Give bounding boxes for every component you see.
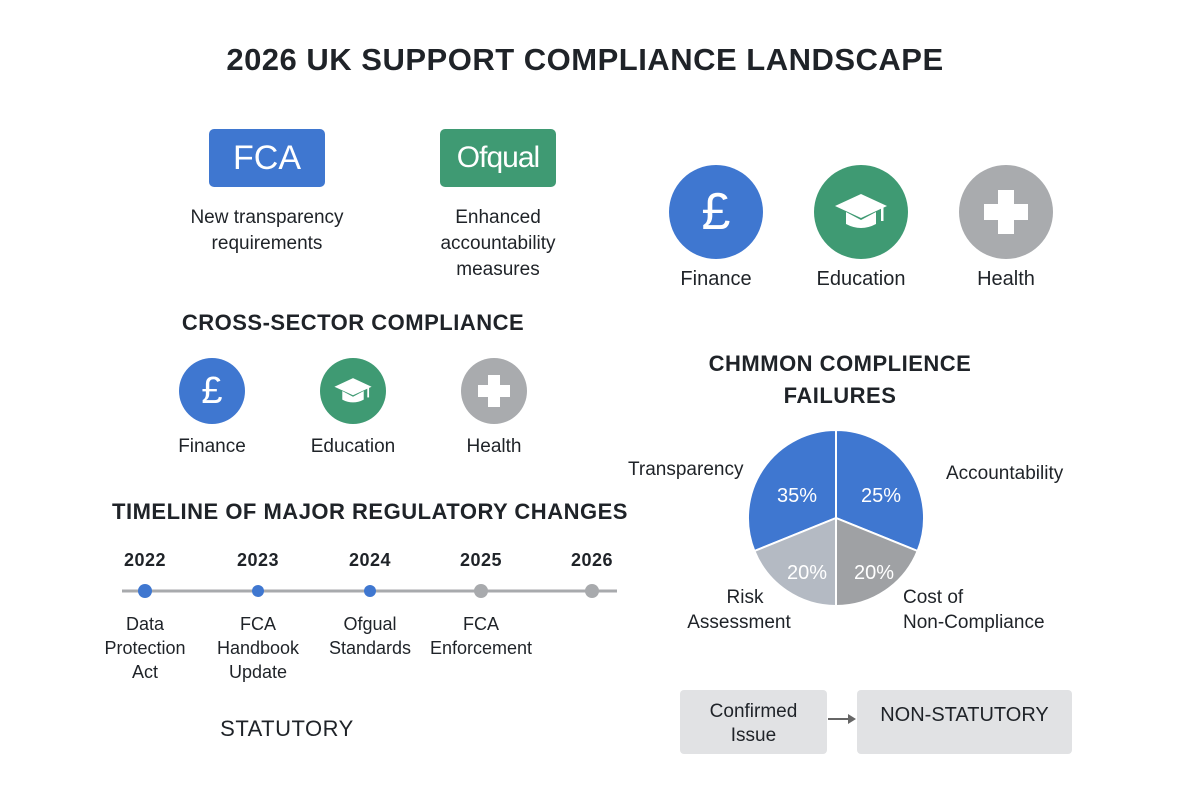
pie chart: 20% [854, 562, 894, 584]
icons: large sectors [669, 165, 1053, 290]
timeline: 2022 [124, 550, 166, 570]
timeline: Update [229, 662, 287, 682]
heading: failures: CHMMON COMPLIENCE [709, 351, 971, 376]
heading: cross-sector: CROSS-SECTOR COMPLIANCE [182, 310, 524, 335]
pie chart: 35% [777, 485, 817, 507]
timeline: Standards [329, 638, 411, 658]
text: Ofqual: Enhanced accountability measures [440, 207, 556, 280]
timeline [104, 550, 617, 682]
icon: education [814, 165, 908, 259]
icons: small sectors: Education [311, 436, 395, 457]
icons: small sectors [178, 358, 527, 457]
icon: health [959, 165, 1053, 259]
box: confirmed issue [680, 690, 827, 754]
arrow [828, 714, 856, 724]
box: non-statutory [857, 690, 1072, 754]
timeline: Handbook [217, 638, 299, 658]
pie chart [628, 431, 1064, 633]
badge: FCA [209, 129, 325, 187]
timeline: FCA [240, 614, 276, 634]
pie chart: Transparency [628, 459, 744, 480]
timeline: 2026 [571, 550, 613, 570]
box: non-statutory: NON-STATUTORY [880, 704, 1049, 726]
pie chart: Cost of [903, 587, 964, 608]
badge: FCA: FCA [233, 139, 301, 177]
title: 2026 UK SUPPORT COMPLIANCE LANDSCAPE [226, 42, 944, 77]
text: FCA: New transparency requirements [190, 207, 344, 254]
pie chart: Non-Compliance [903, 612, 1045, 633]
timeline: Ofgual [343, 614, 397, 634]
icon: finance [669, 165, 763, 259]
heading: timeline: TIMELINE OF MAJOR REGULATORY CHANGES [112, 499, 628, 524]
icons: small sectors: £ [201, 370, 223, 412]
pie chart: Risk [727, 587, 764, 608]
pie chart: 20% [787, 562, 827, 584]
timeline: 2024 [349, 550, 391, 570]
icons: large sectors: Health [977, 268, 1035, 290]
timeline: Act [132, 662, 158, 682]
timeline: Data [126, 614, 164, 634]
timeline: Protection [104, 638, 186, 658]
badge: Ofqual [440, 129, 556, 187]
pie chart: Assessment [687, 612, 791, 633]
box: confirmed issue: Confirmed Issue [710, 701, 797, 746]
labels: Finance [680, 268, 752, 290]
heading: failures [709, 351, 971, 408]
timeline: FCA [463, 614, 499, 634]
heading: failures: FAILURES [784, 383, 896, 408]
pie chart: 25% [861, 485, 901, 507]
pie chart: Accountability [946, 463, 1064, 484]
timeline: 2023 [237, 550, 279, 570]
icons: small sectors: Health [467, 436, 521, 457]
timeline: Enforcement [430, 638, 532, 658]
icons: large sectors: Education [817, 268, 905, 290]
icon: finance: £ [702, 183, 730, 241]
icons: small sectors: Finance [178, 436, 246, 457]
badge: Ofqual: Ofqual [457, 141, 539, 174]
label: statutory: STATUTORY [220, 716, 354, 741]
timeline: 2025 [460, 550, 502, 570]
